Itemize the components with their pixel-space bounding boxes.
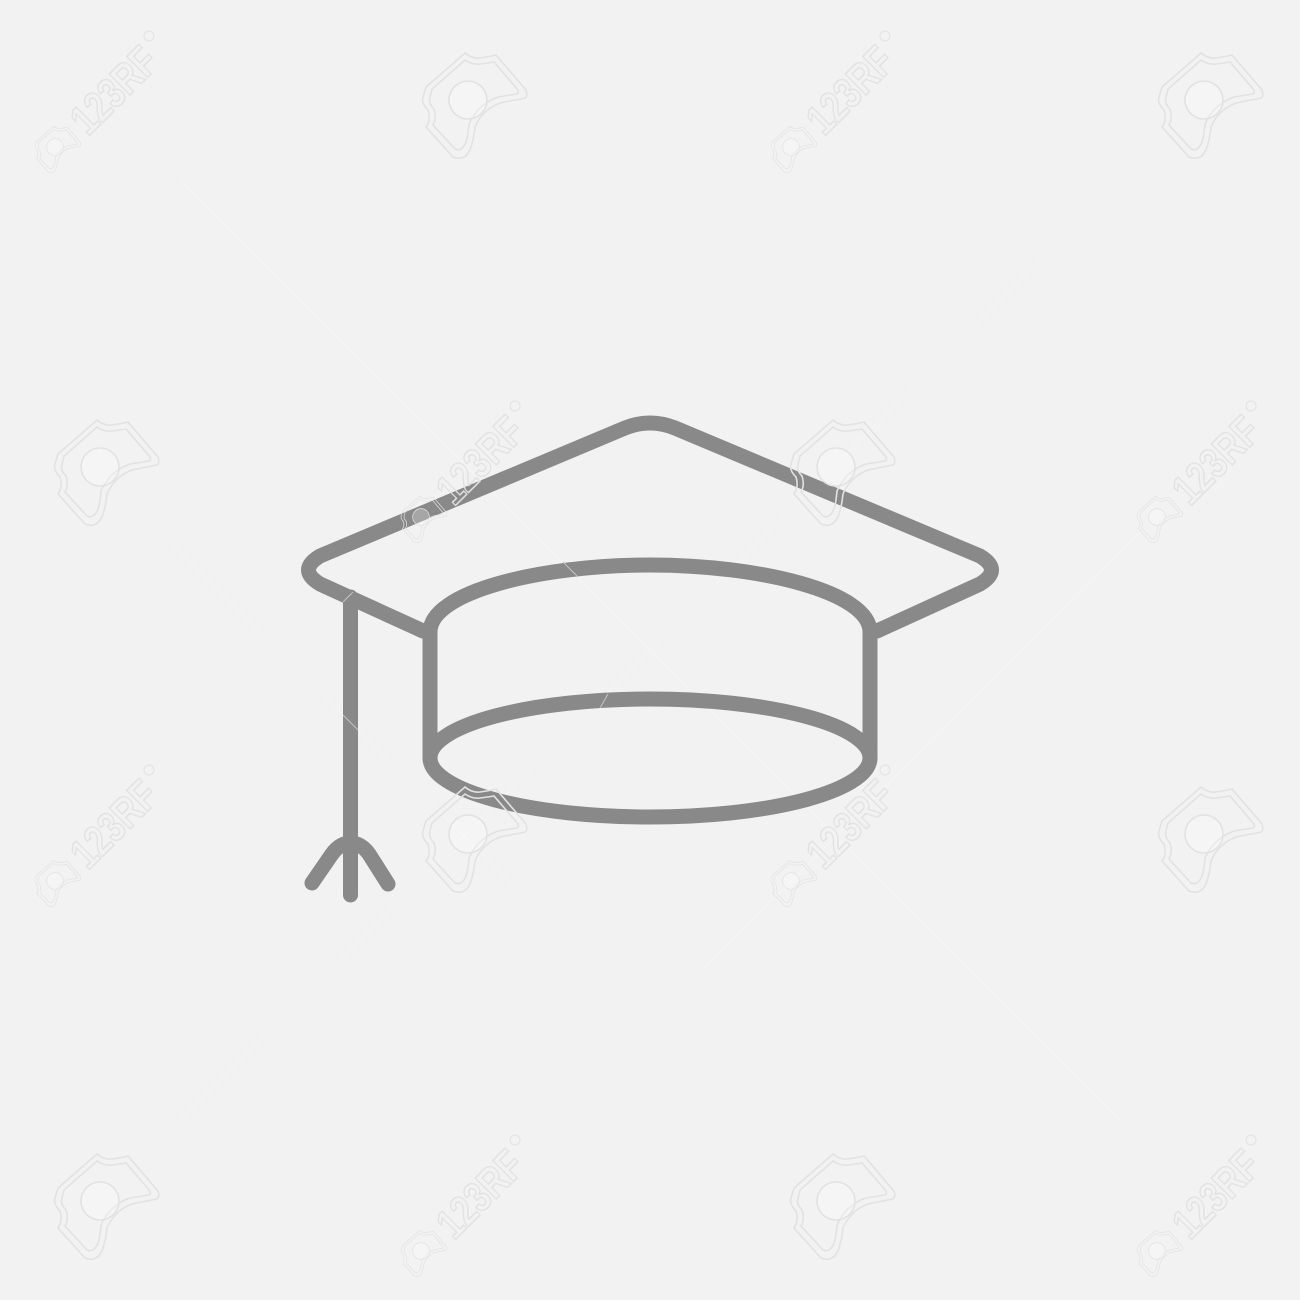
cap board [308, 423, 992, 631]
watermark: 123RF top third: 123RF [797, 37, 904, 144]
watermark: 123RF top left: 123RF [61, 37, 168, 144]
watermark: 123RF bottom row two [401, 1135, 534, 1277]
watermark: egg logo top row 2 [423, 53, 527, 158]
watermark: egg logo bottom row 1 [55, 1154, 159, 1259]
watermark: egg logo top row 4 [1159, 53, 1263, 158]
tassel cord [343, 597, 358, 895]
watermark: egg logo third row 2 [423, 787, 527, 892]
watermark: egg logo bottom row 3 [791, 1154, 895, 1259]
watermark: 123RF third row one [35, 765, 168, 907]
watermark: 123RF second row two [401, 401, 534, 543]
watermark: 123RF third row one: 123RF [61, 771, 168, 878]
tassel fringe [312, 843, 388, 884]
faint diagonal grid lines [160, 180, 1140, 1120]
watermark: egg logo third row 4 [1159, 787, 1263, 892]
watermark: 123RF second row two: 123RF [427, 407, 534, 514]
watermark: 123RF top left [35, 31, 168, 173]
icon: graduation cap [308, 423, 992, 895]
watermark: egg logo second row 3 [791, 420, 895, 525]
cap base ellipse [430, 699, 870, 817]
watermark: 123RF second row four: 123RF [1163, 407, 1270, 514]
watermark: 123RF bottom row four: 123RF [1163, 1141, 1270, 1248]
watermark: 123RF third row three: 123RF [797, 771, 904, 878]
watermark: 123RF bottom row four [1137, 1135, 1270, 1277]
watermark: 123RF top third [771, 31, 904, 173]
watermark: 123RF second row four [1137, 401, 1270, 543]
watermark: 123RF third row three [771, 765, 904, 907]
watermark: 123RF bottom row two: 123RF [427, 1141, 534, 1248]
faint seam ticks on cap [343, 562, 608, 730]
cap crown [430, 565, 870, 758]
watermark: egg logo second row 1 [55, 420, 159, 525]
